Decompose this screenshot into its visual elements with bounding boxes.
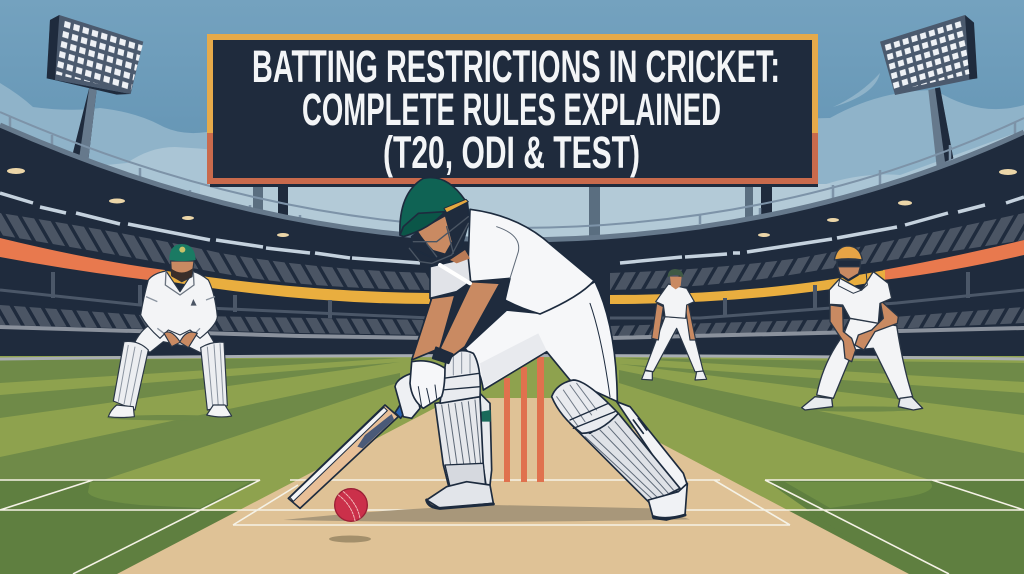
pitch	[117, 398, 909, 574]
batsman shadow	[283, 505, 690, 522]
right shoe	[648, 483, 687, 520]
fielder: helmeted fielder	[802, 246, 923, 412]
fielder: wicket keeper	[107, 244, 233, 420]
roof white dashes	[0, 193, 1024, 263]
scoreboard legs	[253, 184, 772, 238]
right leg calf	[617, 402, 687, 493]
floodlight right	[880, 15, 977, 167]
right shin pad	[570, 413, 680, 503]
sky and clouds	[0, 0, 1024, 260]
scoreboard panel	[207, 34, 818, 187]
helmet grille	[409, 217, 468, 263]
title	[252, 41, 780, 178]
stumps	[504, 357, 544, 482]
batsman	[283, 178, 690, 522]
gloves	[395, 361, 445, 418]
left shoe	[427, 482, 493, 508]
orange and yellow bands	[0, 238, 165, 282]
floodlight left	[47, 15, 143, 160]
title: COMPLETE RULES EXPLAINED	[302, 84, 721, 135]
rear leg calf behind pad	[480, 393, 492, 485]
back sleeve	[430, 257, 471, 298]
ball	[335, 489, 367, 521]
wristband	[433, 347, 453, 363]
bat	[288, 391, 414, 508]
fielder: distant fielder	[642, 269, 707, 380]
ball shadow	[329, 536, 371, 542]
shirt	[468, 209, 594, 314]
neck	[450, 250, 470, 263]
lower tier rails and seating	[0, 290, 1024, 318]
title: (T20, ODI & TEST)	[383, 127, 640, 178]
crease markings	[0, 480, 1024, 574]
stadium stand	[0, 112, 1024, 358]
ceiling lights	[7, 168, 1017, 237]
left pad	[435, 351, 487, 490]
upper seating	[0, 213, 430, 290]
helmet	[400, 178, 465, 235]
right knee roll	[552, 380, 618, 433]
arms	[412, 282, 500, 360]
helmet guard and face	[412, 202, 469, 258]
trousers	[465, 282, 617, 402]
cricket field grass	[0, 356, 1024, 574]
